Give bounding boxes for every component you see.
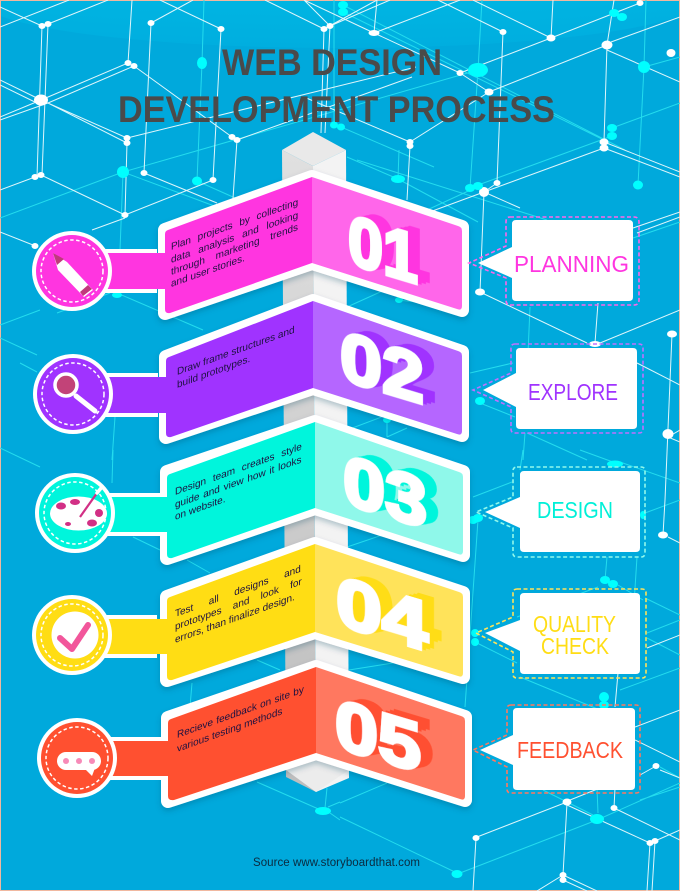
right panel 5	[316, 667, 465, 800]
callout: feedback: FEEDBACK	[517, 737, 624, 763]
left panel 2	[166, 301, 313, 437]
right panel 3	[315, 422, 463, 555]
palette glyph	[50, 487, 107, 530]
description 2: build prototypes.	[177, 354, 250, 391]
right panel 2	[313, 301, 462, 435]
title: WEB DESIGN	[222, 42, 442, 83]
callout: quality check: CHECK	[541, 633, 610, 659]
left panel 1	[165, 177, 312, 313]
description 3: on website.	[175, 494, 225, 523]
description 1: and user stories.	[171, 253, 245, 290]
callout: planning: PLANNING	[514, 251, 629, 277]
right panel 1	[312, 177, 462, 310]
left panel 5	[168, 667, 316, 800]
description 3	[175, 442, 302, 523]
callout: planning	[469, 217, 639, 305]
callout: quality check: QUALITY	[533, 611, 616, 637]
number 05: 05	[335, 684, 421, 788]
banner 3: design	[167, 422, 463, 558]
left panel 4	[167, 544, 315, 680]
banner 4: quality check	[167, 544, 463, 680]
left panel 3	[167, 422, 315, 558]
callout: feedback	[473, 705, 640, 793]
description 3: Design team creates style	[175, 442, 302, 498]
magnifier glyph	[55, 374, 95, 411]
description 4: errors, than finalize design.	[175, 592, 295, 646]
description 1	[171, 197, 298, 290]
description 4: prototypes and look for	[175, 576, 302, 633]
number 01: 01	[348, 200, 418, 300]
description 5: various testing methods	[177, 706, 282, 755]
number 04: 04	[336, 561, 428, 667]
icon circle 2: magnifier	[33, 354, 166, 434]
icon circle 1: pencil	[32, 231, 166, 311]
description 1: data analysis and looking	[171, 210, 298, 266]
right panel 4	[315, 544, 463, 677]
callout: explore	[473, 344, 643, 433]
description 5: Recieve feedback on site by	[177, 684, 305, 741]
icon circle 5: chat	[37, 718, 168, 798]
pencil glyph	[53, 253, 93, 297]
callout: design	[476, 467, 645, 557]
number 02: 02	[340, 316, 424, 420]
check glyph	[52, 612, 98, 658]
banner 2: explore	[166, 301, 462, 437]
banner 1: planning	[165, 177, 462, 313]
callout: explore: EXPLORE	[528, 379, 618, 405]
description 1: Plan projects by collecting	[171, 197, 298, 253]
central column	[282, 132, 349, 792]
icon circle 3: palette	[35, 473, 167, 553]
description 2: Draw frame structures and	[177, 325, 295, 378]
number 03: 03	[343, 440, 427, 544]
description 4	[175, 564, 302, 646]
title	[118, 42, 555, 130]
description 4: Test all designs and	[175, 564, 301, 620]
description 3: guide and view how it looks	[175, 455, 301, 511]
callout: design: DESIGN	[537, 497, 613, 523]
banner 5: feedback	[168, 667, 465, 801]
title: DEVELOPMENT PROCESS	[118, 89, 555, 130]
chat glyph	[57, 752, 101, 776]
icon circle 4: check	[32, 595, 167, 675]
source credit: Source www.storyboardthat.com	[253, 857, 420, 869]
callout: quality check	[476, 589, 646, 678]
description 1: through marketing trends	[171, 222, 298, 278]
